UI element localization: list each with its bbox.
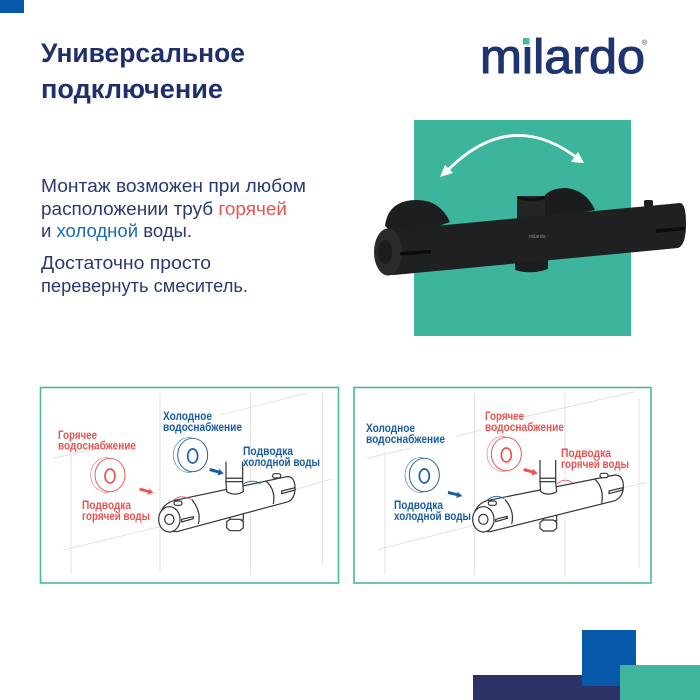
icon: cold water ring [173,438,208,472]
text block: description: расположении труб горячей [41,198,287,219]
text block: description: и холодной воды. [41,220,192,241]
label: hot inlet [561,448,629,471]
panel: right connection diagram [354,388,651,583]
text block: description [41,175,306,296]
label: cold inlet [243,446,320,469]
arrow: hot [139,488,153,495]
label: cold supply [366,423,445,446]
icon: mixer outline [159,462,295,532]
corner accent: bottom right blocks [473,630,700,700]
label: cold inlet: Подводка [394,500,444,512]
title: подключение [41,74,223,104]
icon: cold water ring [405,458,439,492]
label: hot inlet: Подводка [561,448,612,460]
logo: milardo: milardo [480,31,645,84]
text block: description: Достаточно просто [41,252,211,273]
label: hot supply: водоснабжение [485,422,564,434]
corner accent: top left [0,0,24,13]
label: cold inlet [394,500,471,523]
label: hot supply [58,430,136,452]
icon: black thermostatic mixer [374,188,686,276]
label: hot supply: Горячее [58,430,97,442]
title: Универсальное [41,38,245,68]
label: hot supply: водоснабжение [58,440,136,452]
icon: hot water ring [487,437,521,471]
label: hot inlet: горячей воды [561,459,629,471]
label: hot inlet: горячей воды [82,511,150,523]
arrow: cold [209,468,224,476]
label: cold supply [163,411,242,434]
logo: milardo: ® [642,39,648,47]
label: hot inlet: Подводка [82,500,132,512]
text block: description: перевернуть смеситель. [41,275,248,296]
text block: description: Монтаж возможен при любом [41,175,306,196]
label: hot inlet [82,500,150,523]
arrow: cold [448,491,462,498]
label: cold supply: Холодное [366,423,415,435]
label: cold supply: водоснабжение [163,422,242,434]
panel: left connection diagram [40,388,338,583]
label: cold inlet: Подводка [243,446,294,458]
label: hot supply [485,411,564,434]
label: cold inlet: холодной воды [394,511,471,523]
icon: black thermostatic mixer: milardo [529,234,546,240]
icon: mixer outline [473,460,623,532]
label: hot supply: Горячее [485,411,524,423]
arrow: rotation double arrow [440,135,584,177]
label: cold supply: водоснабжение [366,434,445,446]
label: cold supply: Холодное [163,411,212,423]
icon: hot water ring [91,458,125,492]
arrow: hot [523,468,538,476]
label: cold inlet: холодной воды [243,457,320,469]
title [41,38,245,104]
panel: teal square behind mixer [414,120,631,336]
